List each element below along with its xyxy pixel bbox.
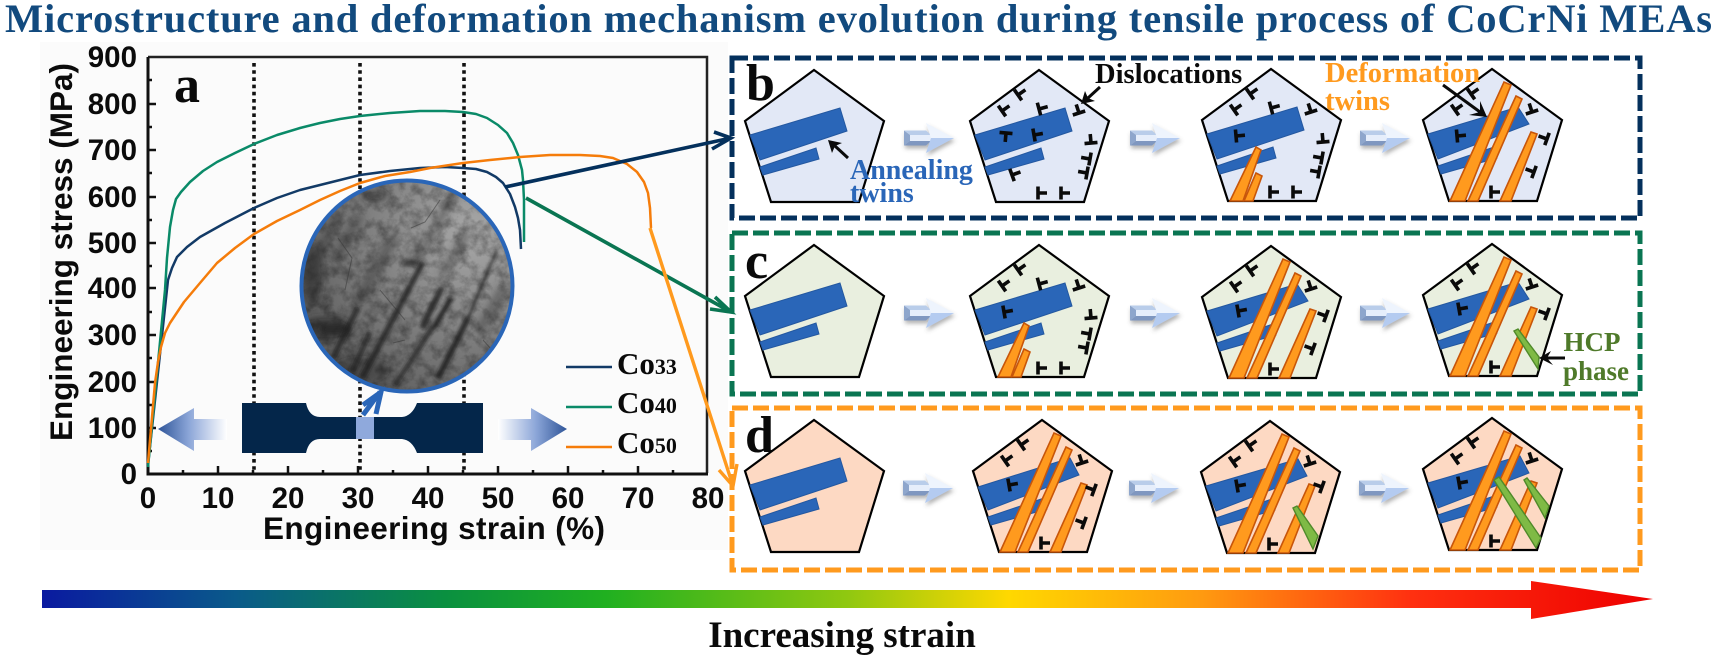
y axis title: Engineering stress (MPa) bbox=[43, 63, 79, 441]
curve Co33 bbox=[148, 167, 521, 465]
arrow: curve Co40 to panel c bbox=[526, 198, 731, 312]
grain b3 bbox=[1202, 69, 1341, 201]
panel b frame bbox=[732, 58, 1640, 218]
x axis tick labels: 70 bbox=[622, 482, 654, 515]
y axis tick labels bbox=[88, 41, 137, 491]
legend: Co50 bbox=[617, 425, 677, 460]
callout: HCP phase bbox=[1539, 327, 1629, 386]
y axis tick labels: 900 bbox=[88, 41, 137, 74]
grain d2 bbox=[973, 420, 1112, 552]
callout: deformation twins bbox=[1325, 58, 1487, 117]
plot axes frame bbox=[148, 57, 708, 474]
callout: annealing twins: twins bbox=[850, 178, 914, 209]
grain c4 bbox=[1423, 244, 1562, 376]
increasing strain gradient arrow bbox=[42, 581, 1653, 619]
curve Co40 bbox=[148, 111, 524, 467]
grain b1 bbox=[745, 70, 884, 202]
TEM micrograph inset bbox=[300, 179, 514, 393]
right tensile arrow bbox=[498, 408, 567, 451]
dog-bone tensile specimen bbox=[242, 403, 483, 453]
y axis tick labels: 0 bbox=[121, 458, 137, 491]
increasing strain label: Increasing strain bbox=[708, 615, 976, 656]
x axis title: Engineering strain (%) bbox=[263, 510, 605, 546]
x axis tick labels: 60 bbox=[552, 482, 584, 515]
callout: HCP phase: HCP bbox=[1564, 327, 1620, 357]
x axis tick labels: 0 bbox=[140, 482, 156, 515]
y axis tick labels: 700 bbox=[88, 134, 137, 167]
x axis tick labels: 80 bbox=[692, 482, 724, 515]
panel a: stress-strain chart bbox=[40, 41, 728, 550]
callout: dislocations bbox=[1081, 59, 1242, 104]
x axis tick labels bbox=[140, 482, 724, 515]
grain d3 bbox=[1201, 421, 1340, 553]
panel letter a: a bbox=[174, 57, 200, 114]
panel c letter: c bbox=[745, 233, 768, 290]
panel d letter: d bbox=[745, 407, 774, 464]
y axis tick labels: 600 bbox=[88, 181, 137, 214]
grain c3 bbox=[1202, 246, 1341, 378]
x axis tick labels: 30 bbox=[342, 482, 374, 515]
grain c2 bbox=[970, 245, 1109, 377]
grain b2 bbox=[970, 70, 1109, 202]
x axis tick labels: 50 bbox=[482, 482, 514, 515]
callout: HCP phase: phase bbox=[1563, 356, 1629, 386]
block arrows between grains bbox=[903, 123, 1410, 503]
dotted strain markers bbox=[254, 63, 464, 472]
gauge section marker bbox=[356, 417, 374, 439]
callout: annealing twins bbox=[828, 140, 973, 209]
blue arrow to micrograph bbox=[363, 392, 381, 415]
grain d1 bbox=[745, 420, 884, 552]
x axis tick labels: 10 bbox=[202, 482, 234, 515]
curve Co50 bbox=[148, 155, 651, 463]
legend: Co33 bbox=[617, 346, 677, 381]
grain b4 bbox=[1423, 69, 1562, 201]
left tensile arrow bbox=[158, 408, 227, 451]
legend: Co40 bbox=[617, 385, 677, 420]
y axis tick labels: 300 bbox=[88, 319, 137, 352]
grain c1 bbox=[745, 245, 884, 377]
y axis tick labels: 500 bbox=[88, 227, 137, 260]
y axis tick labels: 200 bbox=[88, 366, 137, 399]
callout: deformation twins: twins bbox=[1325, 86, 1390, 117]
y axis tick labels: 400 bbox=[88, 272, 137, 305]
callout: deformation twins: Deformation bbox=[1325, 58, 1480, 89]
arrow: curve Co33 to panel b bbox=[505, 132, 731, 187]
panel c frame bbox=[732, 233, 1640, 394]
arrow: curve Co50 to panel d bbox=[650, 228, 737, 486]
callout: annealing twins: Annealing bbox=[850, 155, 973, 186]
panel b letter: b bbox=[746, 55, 775, 112]
y axis tick labels: 100 bbox=[88, 412, 137, 445]
y axis tick labels: 800 bbox=[88, 88, 137, 121]
legend bbox=[566, 346, 677, 460]
panel d frame bbox=[732, 408, 1640, 570]
x axis tick labels: 40 bbox=[412, 482, 444, 515]
grain d4 bbox=[1423, 418, 1562, 550]
callout: dislocations: Dislocations bbox=[1095, 59, 1242, 90]
x axis tick labels: 20 bbox=[272, 482, 304, 515]
